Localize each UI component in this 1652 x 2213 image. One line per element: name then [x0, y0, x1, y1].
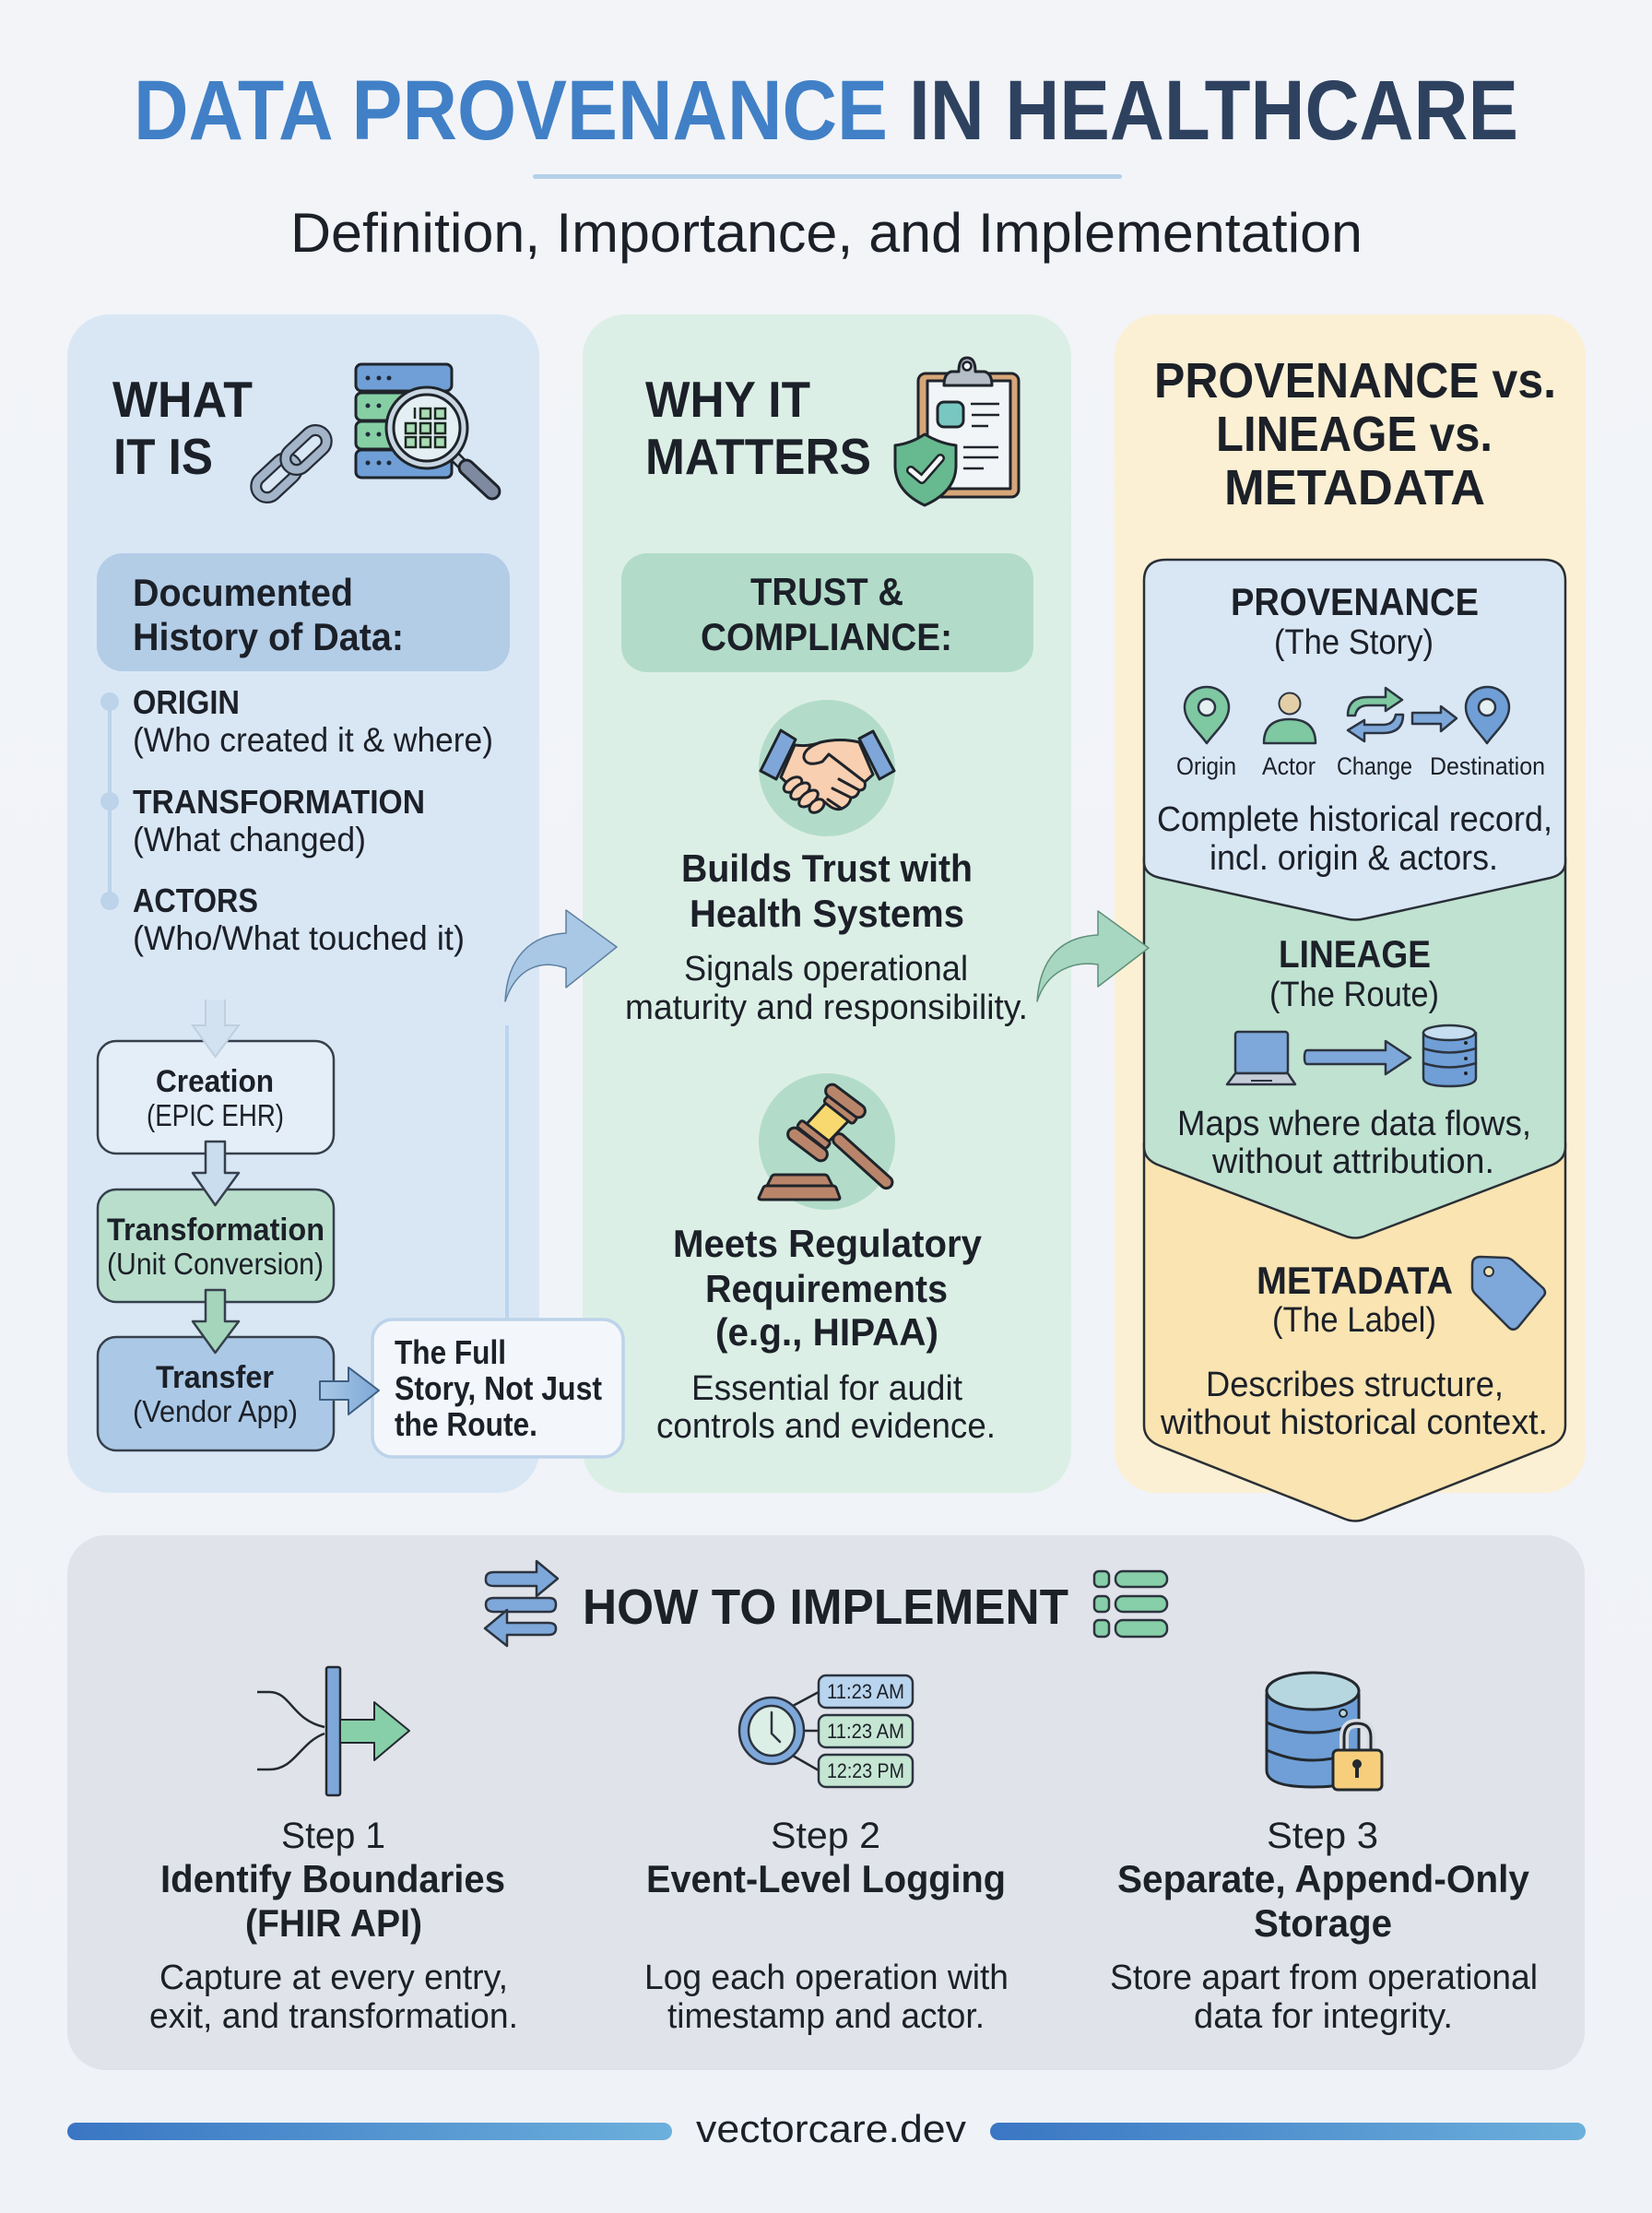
heading: why it matters: WHY IT — [645, 371, 810, 428]
step 3: append-only storage — [1110, 1673, 1538, 2036]
step 1: identify boundaries: Identify Boundaries — [160, 1857, 505, 1900]
icon labels — [1176, 752, 1545, 780]
layer: lineage: LINEAGE — [1279, 932, 1431, 976]
heading: what it is: IT IS — [113, 428, 213, 485]
layer: metadata: (The Label) — [1272, 1301, 1436, 1340]
icon: change — [1348, 688, 1403, 741]
step 3: append-only storage: Store apart from operational — [1110, 1959, 1538, 1997]
title: IN HEALTHCARE — [909, 64, 1518, 158]
flow box: transformation: (Unit Conversion) — [107, 1247, 324, 1281]
text block: builds trust: Builds Trust with — [681, 846, 973, 890]
layer: provenance: PROVENANCE — [1231, 580, 1479, 623]
step 3: append-only storage: data for integrity. — [1194, 1997, 1453, 2036]
title — [134, 64, 1518, 158]
icon: gavel — [759, 1073, 895, 1210]
icon: clock with timestamps: 11:23 AM — [827, 1720, 904, 1743]
layer: provenance: (The Story) — [1274, 623, 1434, 662]
text block: meets regulatory: Meets Regulatory — [673, 1222, 983, 1265]
flow box: transfer: (Vendor App) — [133, 1394, 298, 1428]
icon: clock with timestamps — [739, 1675, 913, 1787]
timeline list: ACTORS — [133, 882, 258, 919]
icon: chain link — [252, 425, 331, 503]
icon: clock with timestamps: 11:23 AM — [827, 1680, 904, 1703]
timeline list — [100, 683, 493, 957]
subheading pill: trust and compliance: TRUST & — [750, 570, 903, 613]
title: DATA PROVENANCE — [134, 64, 888, 158]
layer: provenance — [1144, 560, 1565, 920]
layer: metadata — [1144, 1143, 1565, 1521]
step 1: identify boundaries: Step 1 — [281, 1816, 385, 1856]
subheading pill: trust and compliance: COMPLIANCE: — [701, 615, 952, 658]
layer: lineage: Maps where data flows, — [1177, 1105, 1531, 1143]
heading: comparison: PROVENANCE vs. — [1154, 353, 1556, 408]
layer: metadata: Describes structure, — [1206, 1366, 1504, 1404]
flow box: transfer: Transfer — [156, 1360, 274, 1395]
icon: handshake — [759, 700, 895, 836]
layer: lineage: (The Route) — [1269, 976, 1439, 1014]
callout: full story — [372, 1025, 623, 1457]
flow box: creation — [98, 1041, 334, 1154]
flow box: transformation — [98, 1189, 334, 1302]
layer: lineage: without attribution. — [1211, 1142, 1494, 1181]
arrow: transfer to callout — [320, 1367, 379, 1414]
icon: tag — [1472, 1257, 1545, 1330]
icon: database with lock — [1267, 1673, 1382, 1790]
text block: meets regulatory — [656, 1222, 996, 1446]
icon: exchange arrows — [485, 1561, 558, 1646]
arrow: what to why — [505, 910, 617, 1001]
text block: meets regulatory: (e.g., HIPAA) — [715, 1310, 938, 1354]
timeline list: TRANSFORMATION — [133, 783, 425, 821]
step 2: event-level logging: Event-Level Logging — [646, 1857, 1006, 1900]
step 1: identify boundaries: (FHIR API) — [245, 1901, 422, 1945]
heading: what it is — [112, 371, 253, 485]
footer — [67, 2107, 1586, 2150]
step 1: identify boundaries: Capture at every entry, — [159, 1959, 508, 1997]
text block: meets regulatory: Essential for audit — [691, 1369, 962, 1408]
callout: full story: Story, Not Just — [395, 1369, 602, 1407]
icon labels: Origin — [1176, 752, 1236, 780]
callout: full story: The Full — [395, 1333, 506, 1371]
timeline list: (What changed) — [133, 821, 366, 858]
subtitle: Definition, Importance, and Implementation — [290, 202, 1363, 264]
step 2: event-level logging: Step 2 — [771, 1816, 880, 1856]
arrow: transformation to transfer — [193, 1290, 239, 1353]
panel: provenance vs lineage vs metadata — [1115, 314, 1586, 1521]
icon: boundary crossing — [257, 1667, 409, 1795]
icon: list — [1094, 1571, 1167, 1637]
subheading pill: documented history: History of Data: — [133, 615, 404, 658]
text block: meets regulatory: controls and evidence. — [656, 1407, 996, 1446]
callout: full story: the Route. — [395, 1405, 537, 1443]
layer: lineage — [1144, 858, 1565, 1237]
step 1: identify boundaries: exit, and transformation. — [149, 1997, 518, 2036]
icon labels: Change — [1337, 752, 1412, 780]
step 2: event-level logging: timestamp and actor. — [667, 1997, 985, 2036]
icon: origin pin — [1185, 687, 1229, 743]
arrow: change to destination — [1412, 706, 1457, 731]
layer: provenance: Complete historical record, — [1157, 800, 1552, 839]
arrow: laptop to database — [1304, 1041, 1410, 1074]
heading: comparison: METADATA — [1224, 460, 1485, 515]
heading: comparison — [1154, 353, 1556, 515]
timeline list: ORIGIN — [133, 683, 240, 721]
step 3: append-only storage: Separate, Append-Only — [1117, 1857, 1530, 1900]
timeline list: (Who created it & where) — [133, 721, 493, 759]
icon: clock with timestamps: 12:23 PM — [827, 1759, 904, 1782]
arrow: faded into creation — [193, 1000, 239, 1057]
layer: metadata: METADATA — [1257, 1259, 1453, 1302]
heading: why it matters: MATTERS — [645, 428, 871, 485]
step 3: append-only storage: Step 3 — [1267, 1816, 1378, 1856]
text block: builds trust: Health Systems — [690, 892, 964, 935]
arrow: why to comparison — [1037, 911, 1149, 1001]
icon: database — [1423, 1025, 1476, 1086]
text block: meets regulatory: Requirements — [705, 1267, 948, 1310]
step 2: event-level logging — [644, 1675, 1009, 2036]
flow box: transfer — [98, 1337, 334, 1450]
footer: vectorcare.dev — [696, 2107, 966, 2150]
text block: builds trust: Signals operational — [684, 950, 968, 988]
subheading pill: documented history — [97, 553, 510, 671]
heading: comparison: LINEAGE vs. — [1216, 407, 1493, 462]
panel: how to implement — [67, 1535, 1585, 2070]
icon: destination pin — [1466, 687, 1509, 743]
icon: database with magnifier — [356, 364, 502, 502]
icon: clipboard with shield — [895, 358, 1019, 505]
icon: actor — [1264, 693, 1316, 743]
subheading pill: documented history: Documented — [133, 571, 353, 614]
heading: how to implement: HOW TO IMPLEMENT — [583, 1580, 1068, 1635]
step 1: identify boundaries — [149, 1667, 518, 2036]
heading: why it matters — [645, 371, 871, 485]
step 3: append-only storage: Storage — [1254, 1901, 1392, 1945]
timeline list: (Who/What touched it) — [133, 919, 465, 957]
subheading pill: trust and compliance — [621, 553, 1033, 672]
panel: what it is — [67, 314, 539, 1493]
icon: laptop — [1227, 1032, 1295, 1084]
layer: provenance: incl. origin & actors. — [1210, 839, 1498, 878]
icon labels: Actor — [1262, 752, 1316, 780]
flow box: creation: Creation — [156, 1064, 274, 1099]
flow box: transformation: Transformation — [107, 1213, 324, 1248]
heading: what it is: WHAT — [112, 371, 253, 428]
step 2: event-level logging: Log each operation with — [644, 1959, 1009, 1997]
panel: why it matters — [583, 314, 1071, 1493]
layer: metadata: without historical context. — [1160, 1403, 1548, 1442]
text block: builds trust: maturity and responsibility. — [625, 988, 1028, 1027]
arrow: creation to transformation — [193, 1142, 239, 1205]
text block: builds trust — [625, 846, 1028, 1027]
icon labels: Destination — [1430, 752, 1545, 780]
flow box: creation: (EPIC EHR) — [147, 1098, 284, 1132]
